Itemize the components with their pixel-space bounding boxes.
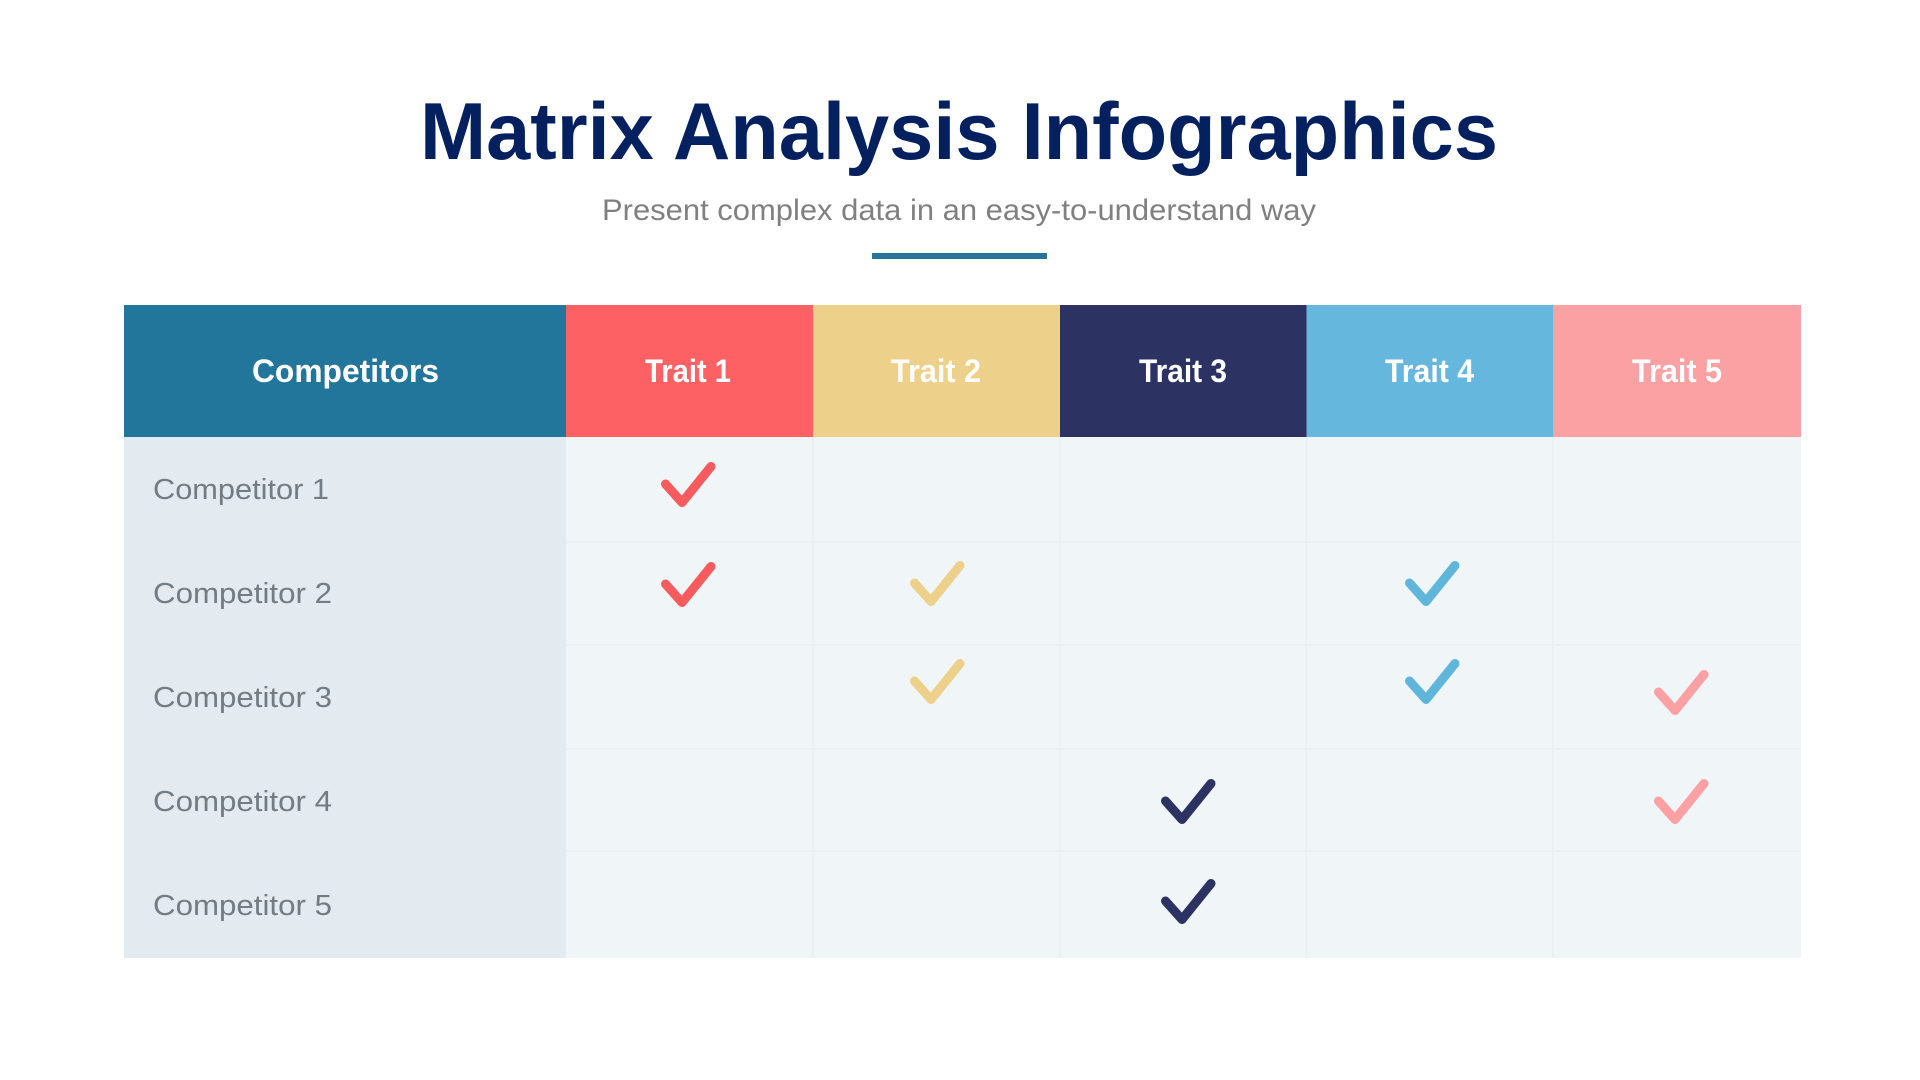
title divider <box>872 253 1047 259</box>
check: competitor 1 trait 1 <box>666 466 711 502</box>
header: trait 4: Trait 4 <box>1385 353 1474 389</box>
label: competitor 1: Competitor 1 <box>153 474 329 506</box>
table body background <box>566 437 1801 958</box>
check: competitor 3 trait 4 <box>1410 664 1455 700</box>
check: competitor 4 trait 3 <box>1166 784 1211 820</box>
label: competitor 5: Competitor 5 <box>153 890 332 922</box>
header: trait 4 <box>1306 305 1553 437</box>
check: competitor 5 trait 3 <box>1166 884 1211 920</box>
header: trait 2: Trait 2 <box>891 353 981 389</box>
check: competitor 3 trait 2 <box>914 664 960 700</box>
header: trait 5 <box>1553 305 1801 437</box>
subtitle: Present complex data in an easy-to-understand way <box>602 194 1316 227</box>
check: competitor 2 trait 2 <box>914 566 960 602</box>
title: Matrix Analysis Infographics <box>420 87 1498 177</box>
header: trait 1: Trait 1 <box>645 353 731 389</box>
check: competitor 2 trait 4 <box>1410 566 1455 602</box>
check: competitor 3 trait 5 <box>1658 674 1704 710</box>
competitor column <box>124 437 566 958</box>
header: trait 5: Trait 5 <box>1632 353 1722 389</box>
header: competitors: Competitors <box>252 353 439 389</box>
label: competitor 2: Competitor 2 <box>153 578 332 610</box>
check: competitor 4 trait 5 <box>1658 784 1704 820</box>
check: competitor 2 trait 1 <box>666 566 711 602</box>
header: competitors <box>124 305 566 437</box>
header: trait 3: Trait 3 <box>1139 353 1227 389</box>
label: competitor 3: Competitor 3 <box>153 682 332 714</box>
matrix table <box>124 305 1801 958</box>
label: competitor 4: Competitor 4 <box>153 786 332 818</box>
header: trait 1 <box>566 305 813 437</box>
header: trait 3 <box>1060 305 1306 437</box>
header: trait 2 <box>813 305 1060 437</box>
